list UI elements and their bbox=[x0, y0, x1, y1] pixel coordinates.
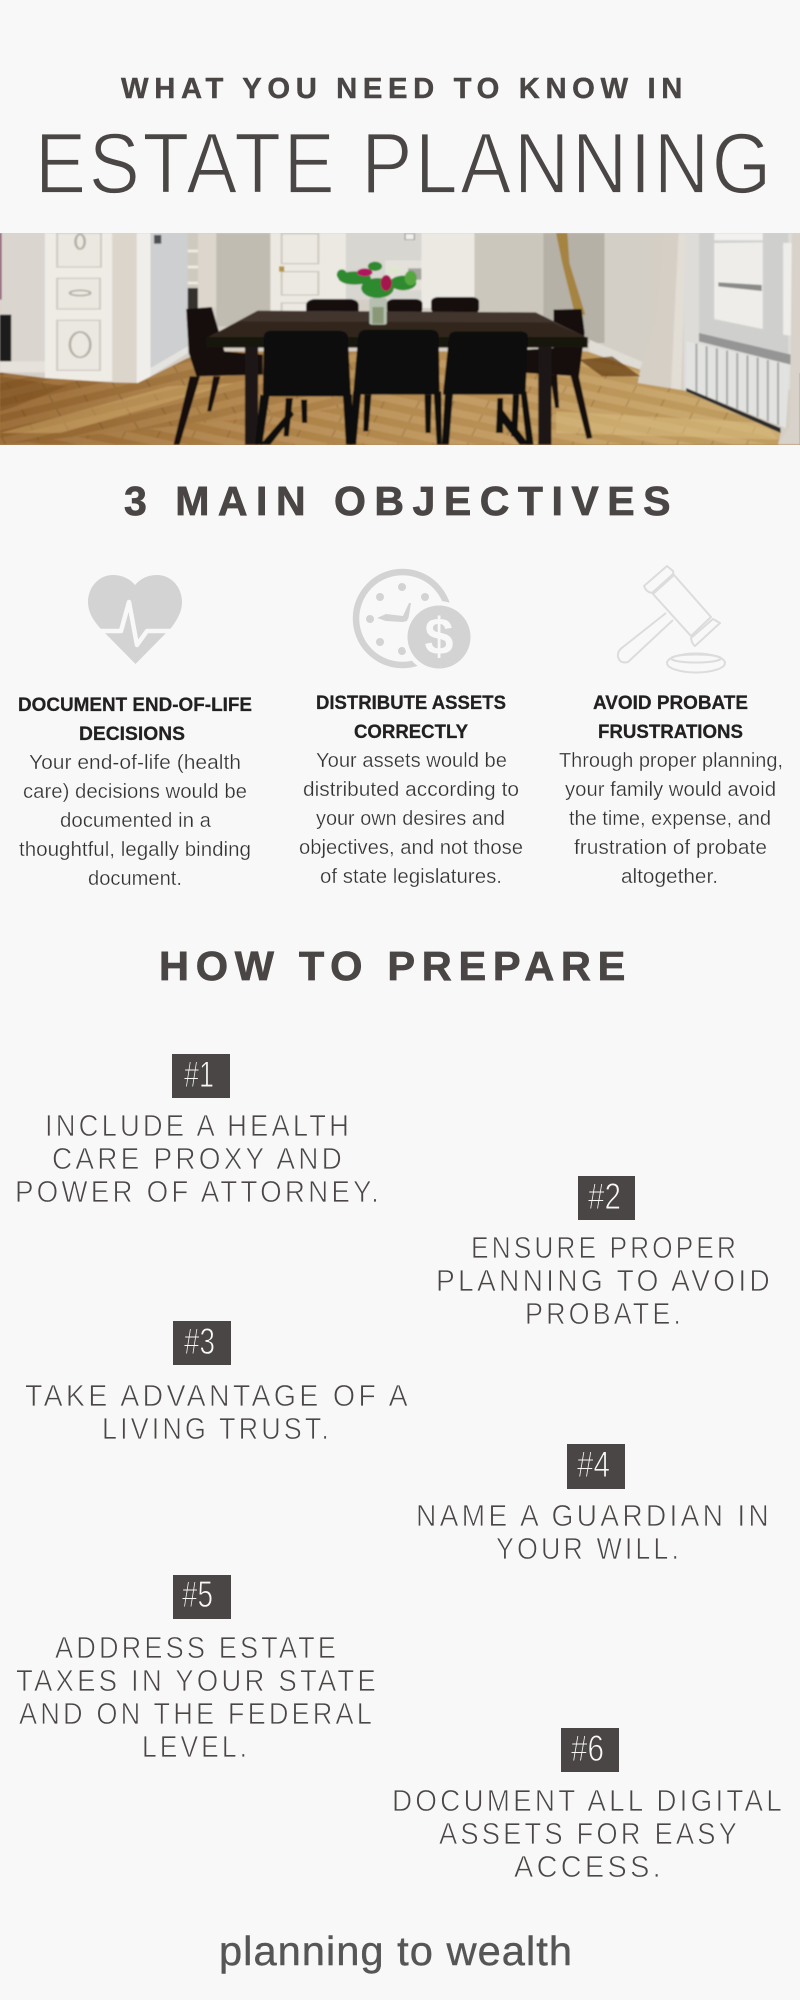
column body: Through proper planning, bbox=[559, 749, 783, 772]
step 5 text: AND ON THE FEDERAL bbox=[19, 1697, 375, 1731]
column body: Your end-of-life (health bbox=[29, 751, 241, 774]
column body: of state legislatures. bbox=[320, 865, 502, 888]
step 1 text: POWER OF ATTORNEY. bbox=[15, 1175, 382, 1209]
step 5 text: ADDRESS ESTATE bbox=[55, 1631, 339, 1665]
badge #3: #3 bbox=[184, 1321, 215, 1362]
front chairs bbox=[255, 330, 534, 445]
step 1 text: INCLUDE A HEALTH bbox=[45, 1109, 352, 1143]
left door bbox=[45, 233, 112, 381]
step 1 text: CARE PROXY AND bbox=[52, 1142, 345, 1176]
column heading bbox=[593, 692, 748, 743]
column heading: DECISIONS bbox=[79, 723, 185, 745]
flower vase bbox=[369, 298, 387, 325]
badge #3 bbox=[173, 1321, 231, 1365]
badge #4: #4 bbox=[577, 1444, 610, 1485]
column: avoid probate frustrations bbox=[559, 692, 783, 888]
curtain bbox=[640, 362, 652, 370]
table top bbox=[207, 311, 588, 338]
step 3 text bbox=[25, 1379, 411, 1446]
photo: dining room bbox=[0, 233, 800, 445]
table legs bbox=[245, 346, 258, 445]
column body: frustration of probate bbox=[574, 836, 767, 859]
step 4 text: YOUR WILL. bbox=[496, 1532, 682, 1566]
icon: clock with dollar coin: $ bbox=[425, 608, 454, 666]
footer logo: planning to wealth bbox=[219, 1928, 573, 1974]
heading: 3 main objectives: 3 MAIN OBJECTIVES bbox=[124, 478, 679, 524]
badge #6: #6 bbox=[571, 1728, 604, 1769]
column body bbox=[19, 751, 251, 890]
side chairs bbox=[186, 307, 263, 376]
column heading: DISTRIBUTE ASSETS bbox=[316, 692, 506, 714]
step 2 bbox=[436, 1176, 773, 1331]
column body: your own desires and bbox=[316, 807, 505, 830]
step 2 text: ENSURE PROPER bbox=[471, 1231, 739, 1265]
icon: heart with pulse bbox=[88, 575, 182, 664]
column heading: CORRECTLY bbox=[354, 721, 468, 743]
parquet floor bbox=[0, 351, 781, 445]
column heading bbox=[316, 692, 506, 743]
step 1 text bbox=[15, 1109, 382, 1209]
radiator bbox=[686, 341, 790, 428]
column body: distributed according to bbox=[303, 778, 519, 801]
column body: document. bbox=[88, 867, 182, 890]
column body: care) decisions would be bbox=[23, 780, 247, 803]
window wall bbox=[684, 233, 800, 390]
step 3 bbox=[25, 1321, 411, 1446]
step 6 text: ASSETS FOR EASY bbox=[439, 1817, 740, 1851]
column body: your family would avoid bbox=[565, 778, 776, 801]
step 5 bbox=[16, 1574, 379, 1764]
step 2 text bbox=[436, 1231, 773, 1331]
column body: Your assets would be bbox=[316, 749, 507, 772]
step 2 text: PROBATE. bbox=[525, 1297, 684, 1331]
column body: documented in a bbox=[60, 809, 212, 832]
column body: altogether. bbox=[621, 865, 718, 888]
column heading: FRUSTRATIONS bbox=[598, 721, 743, 743]
step 2 text: PLANNING TO AVOID bbox=[436, 1264, 773, 1298]
step 3 text: LIVING TRUST. bbox=[102, 1412, 332, 1446]
wooden sculpture bbox=[556, 233, 585, 315]
badge #5: #5 bbox=[182, 1574, 213, 1615]
far chairs bbox=[305, 298, 360, 312]
badge #6 bbox=[561, 1728, 619, 1772]
kicker heading: WHAT YOU NEED TO KNOW IN bbox=[121, 73, 688, 105]
heading: how to prepare: HOW TO PREPARE bbox=[159, 943, 632, 989]
column body bbox=[559, 749, 783, 888]
badge #5 bbox=[173, 1574, 231, 1619]
step 3 text: TAKE ADVANTAGE OF A bbox=[25, 1379, 411, 1413]
column body bbox=[299, 749, 523, 888]
step 6 bbox=[392, 1728, 785, 1884]
step 5 text bbox=[16, 1631, 379, 1764]
column body: thoughtful, legally binding bbox=[19, 838, 251, 861]
badge #4 bbox=[567, 1444, 625, 1489]
column heading bbox=[18, 694, 252, 745]
badge #2 bbox=[578, 1176, 635, 1220]
step 6 text bbox=[392, 1784, 785, 1884]
column: document end-of-life decisions bbox=[18, 694, 252, 890]
badge #2: #2 bbox=[588, 1176, 621, 1217]
icon: gavel bbox=[618, 566, 725, 672]
column body: the time, expense, and bbox=[569, 807, 771, 830]
centre doors and back room bbox=[270, 233, 346, 313]
column heading: DOCUMENT END-OF-LIFE bbox=[18, 694, 252, 716]
step 1 bbox=[15, 1054, 382, 1209]
badge #1 bbox=[172, 1054, 230, 1098]
icon: clock with dollar coin bbox=[356, 572, 475, 673]
column body: objectives, and not those bbox=[299, 836, 523, 859]
step 4 text bbox=[416, 1499, 772, 1566]
title block bbox=[35, 73, 774, 212]
badge #1: #1 bbox=[184, 1054, 214, 1095]
step 5 text: LEVEL. bbox=[142, 1730, 250, 1764]
step 6 text: ACCESS. bbox=[514, 1850, 664, 1884]
column heading: AVOID PROBATE bbox=[593, 692, 748, 714]
step 4 text: NAME A GUARDIAN IN bbox=[416, 1499, 772, 1533]
step 4 bbox=[416, 1444, 772, 1566]
column: distribute assets correctly bbox=[299, 692, 523, 888]
step 5 text: TAXES IN YOUR STATE bbox=[16, 1664, 379, 1698]
